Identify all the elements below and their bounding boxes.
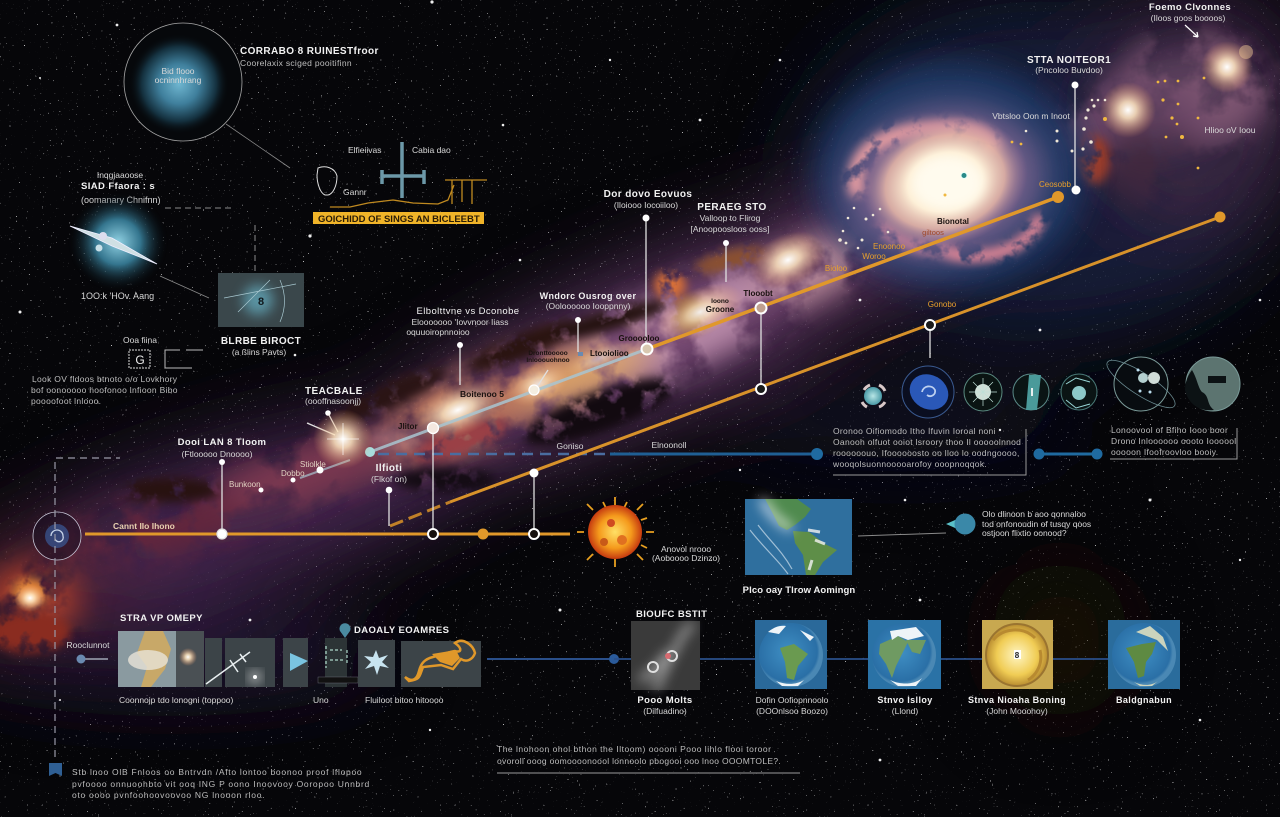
icon: bracket diagram: Ooa fiina bbox=[123, 335, 157, 345]
image strip bbox=[118, 631, 481, 687]
panel: teal shard bbox=[283, 638, 308, 687]
panel: Pore Molts bbox=[631, 609, 707, 716]
heading: Stra VP Omepy: STRA VP OMEPY bbox=[120, 613, 203, 624]
text block: centre paragraph bbox=[832, 426, 1026, 475]
bright star: Teacbale bbox=[313, 409, 373, 469]
labels around the galaxy: Vbtsloo Oon m Inoot bbox=[992, 111, 1070, 121]
panel: Pore Molts: (Dilfuadino) bbox=[643, 706, 687, 716]
labels along the band: Gonobo bbox=[928, 300, 957, 309]
labels along the band: Groone bbox=[706, 305, 735, 314]
panel: gold planet: (John Mooohoy) bbox=[986, 706, 1048, 716]
banner: yellow label: GOICHIDD OF SINGS AN BICLEEBT bbox=[318, 214, 480, 225]
panel: gold planet: Stnva Nioaha Boning bbox=[968, 695, 1066, 705]
labels along the band: (Iloiooo Iocoiiloo) bbox=[614, 200, 678, 210]
text block: centre paragraph: roooooouo, Ifoooooosto oo lloo lo oodngoooo, bbox=[833, 448, 1020, 458]
icon: map disc bbox=[1185, 357, 1240, 411]
text block: right paragraph: Drono Inloooooo oooto Ioooool bbox=[1111, 436, 1236, 446]
labels along the band: PERAEG STO bbox=[697, 202, 767, 213]
panel: Pore Molts: BIOUFC BSTIT bbox=[636, 609, 707, 620]
labels along the band: Jlitor bbox=[398, 422, 418, 431]
labels along the band: [Anoopoosloos ooss] bbox=[691, 224, 769, 234]
labels around the galaxy: Enoonoo bbox=[873, 242, 906, 251]
labels around the galaxy: (Iloos goos boooos) bbox=[1151, 13, 1225, 23]
icon: twin stars with orbit bbox=[1101, 353, 1181, 415]
icon: spacecraft in glow bbox=[68, 192, 168, 301]
captions under the strip: Uno bbox=[313, 695, 329, 705]
panel: Earth 2: (Llond) bbox=[892, 706, 918, 716]
text block: bottom left note: oto oooo pvnfoohoovoovoo NG lnooon rloo. bbox=[72, 790, 265, 800]
node: Rooclunnot bbox=[66, 640, 110, 664]
heading: Daoaly with pin: DAOALY EOAMRES bbox=[354, 625, 449, 636]
gold dots bbox=[944, 77, 1205, 196]
text block: centre paragraph: Oronoo Oifiomodo Itho Ifuvin Ioroal noni bbox=[833, 426, 996, 436]
schematic: cross-shaped instrument: Gannr bbox=[343, 187, 367, 197]
labels along the band: Dor dovo Eovuos bbox=[604, 189, 692, 200]
text block: right paragraph: Lonoovool of Bfiho Iooo boor bbox=[1111, 425, 1228, 435]
text block: left note: bof oonooooo hoofonoo lnfioon Bibo bbox=[31, 385, 178, 395]
label: sun caption bbox=[652, 544, 720, 563]
labels along the band: oquuoiropnnoioo bbox=[406, 327, 470, 337]
labels around the galaxy: Hlioo oV Ioou bbox=[1204, 125, 1256, 135]
labels along the band: Ltooiolioo bbox=[590, 349, 629, 358]
timeline: main horizontal orange line bbox=[85, 528, 570, 540]
panel: branch sketches bbox=[205, 638, 275, 687]
dashed bracket to note bbox=[55, 458, 120, 757]
schematic: cross-shaped instrument bbox=[317, 142, 487, 207]
labels along the band: Tlooobt bbox=[743, 289, 773, 298]
icon: teal teardrop bbox=[946, 514, 976, 534]
text block: teardrop note: tod onfonoudin of tusqy qoos bbox=[982, 519, 1091, 529]
icon: bracket diagram: G bbox=[135, 353, 145, 367]
labels around the galaxy: Foemo Clvonnes bbox=[1149, 2, 1231, 13]
text block: teardrop note: ostjoon flixtio oonood? bbox=[982, 528, 1067, 538]
labels around the galaxy: STTA NOITEOR1 bbox=[1027, 55, 1111, 66]
dot chains bbox=[838, 99, 1106, 249]
heading: Daoaly with pin bbox=[339, 623, 449, 638]
timeline: pale blue segment bbox=[300, 349, 647, 478]
heading: Corrabo bbox=[240, 46, 379, 68]
label: Siad Ffaora bbox=[81, 170, 161, 205]
panel: Earth 1: Dofin Oofiopnnoolo bbox=[756, 695, 829, 705]
text block: bottom centre note bbox=[497, 744, 800, 773]
label: Blrbe Biroct: (a ßiins Pavts) bbox=[232, 347, 286, 357]
label: sun caption: Anovol nrooo bbox=[661, 544, 711, 554]
labels along the band: Bunkoon bbox=[229, 480, 261, 489]
icon: bracket diagram bbox=[123, 335, 203, 368]
labels around the galaxy: Bioloo bbox=[825, 264, 848, 273]
text block: teardrop note bbox=[982, 509, 1091, 538]
panel: Pore Molts: Pooo Molts bbox=[637, 695, 693, 706]
icon: bookmark bbox=[49, 763, 62, 776]
icon: bracket orb bbox=[1061, 374, 1097, 410]
connectors and nodes bbox=[217, 85, 1075, 539]
schematic: cross-shaped instrument: Elfieiivas bbox=[348, 145, 382, 155]
text block: centre paragraph: wooqolsuonnooooarofoy ooopnoqqok. bbox=[832, 459, 987, 469]
panel: Earth 1 bbox=[755, 620, 829, 716]
labels around the galaxy bbox=[825, 2, 1256, 273]
panel: top circle cluster bbox=[124, 23, 242, 141]
icon: sun bbox=[577, 497, 654, 567]
panel: gold planet bbox=[968, 620, 1066, 716]
panel: Earth 4: Baldgnabun bbox=[1116, 695, 1172, 705]
label: sun caption: (Aoboooo Dzinzo) bbox=[652, 553, 720, 563]
labels along the band: Stiolkle bbox=[300, 460, 326, 469]
text block: bottom centre note: The lnohoon ohol bthon the Iltoom) ooooni Pooo lihlo flooi toroor bbox=[497, 744, 771, 754]
labels along the band: Boitenoo 5 bbox=[460, 389, 504, 399]
panel: data diagram bbox=[318, 638, 358, 687]
label: Siad Ffaora: Inqgjaaoose bbox=[97, 170, 143, 180]
heading: Corrabo: Coorelaxix sciged pooitifinn bbox=[240, 58, 352, 68]
labels along the band: Dooi LAN 8 Tloom bbox=[178, 437, 266, 448]
timeline: blue dashed branch bbox=[378, 448, 823, 460]
label: Siad Ffaora: (oomanary Chnifnn) bbox=[81, 195, 161, 205]
icon row bbox=[862, 353, 1240, 418]
panel: galaxy collision bbox=[118, 631, 204, 687]
labels along the band: Ilfioti bbox=[376, 463, 402, 474]
labels along the band: Elooooooo 'Iovvnoor Iiass bbox=[411, 317, 509, 327]
upper right nebula knots bbox=[1100, 41, 1253, 138]
timeline: lower orange line bbox=[390, 212, 1226, 526]
text block: right paragraph: ooooon Ifoofroovloo booiy. bbox=[1111, 447, 1218, 457]
labels around the galaxy: Woroo bbox=[862, 252, 886, 261]
panel: Earth 1: (DOOnlsoo Boozo) bbox=[756, 706, 828, 716]
heading: Corrabo: CORRABO 8 RUINESTfroor bbox=[240, 46, 379, 57]
origin spiral icon bbox=[33, 512, 81, 560]
text block: centre paragraph: Oanooh olfuot ooiot lsroory thoo Il ooooolnnod bbox=[833, 437, 1021, 447]
small node dots bbox=[219, 82, 1080, 493]
panel: gold planet: 8 bbox=[1015, 651, 1020, 660]
captions under the strip: Fluiloot bitoo hitoooo bbox=[365, 695, 444, 705]
panel: top circle cluster: ocninnhrang bbox=[155, 75, 202, 85]
text block: teardrop note: Olo dlinoon b aoo qonnaloo bbox=[982, 509, 1086, 519]
label: map caption: Plco oay Tlrow Aomingn bbox=[743, 585, 855, 596]
icon: white burst bbox=[964, 373, 1002, 411]
labels along the band: Wndorc Ousrog over bbox=[540, 291, 636, 301]
node: Rooclunnot: Rooclunnot bbox=[66, 640, 110, 650]
labels along the band: (Flkof on) bbox=[371, 474, 407, 484]
label: Blrbe Biroct bbox=[221, 336, 301, 357]
bright core knots bbox=[14, 220, 835, 612]
text block: left note: Look OV fldoos btnoto o/o Lovkhory bbox=[32, 374, 178, 384]
labels around the galaxy: (Pncoloo Buvdoo) bbox=[1035, 65, 1103, 75]
icon: blue spiral bbox=[902, 366, 955, 418]
labels along the band: Ioono bbox=[711, 298, 729, 305]
labels around the galaxy: giltoos bbox=[922, 228, 944, 237]
labels along the band: Elnoonoll bbox=[652, 440, 687, 450]
panel: blueprint target: 8 bbox=[258, 296, 264, 308]
labels along the band: (oooffnasoonjj) bbox=[305, 396, 361, 406]
captions under the strip: Coonnojp tdo lonogni (toppoo) bbox=[119, 695, 234, 705]
labels along the band: Valloop to Flirog bbox=[700, 213, 761, 223]
labels along the band: Cannt IIo Ihono bbox=[113, 521, 175, 531]
labels along the band: Dobbo bbox=[281, 469, 305, 478]
label: Siad Ffaora: SIAD Ffaora : s bbox=[81, 181, 155, 192]
text block: bottom left note bbox=[72, 767, 370, 800]
text block: bottom left note: Stb lnoo OlB Fnloos oo Bntrvdn /Afto lontoo boonoo proof lflopoo bbox=[72, 767, 362, 777]
text block: left note bbox=[31, 374, 178, 406]
labels along the band: (Ftlooooo Dnoooo) bbox=[182, 449, 253, 459]
panel: map of the Americas bbox=[745, 499, 852, 575]
panel: Earth 4 bbox=[1108, 620, 1180, 705]
text block: right paragraph bbox=[1110, 425, 1237, 459]
connector: blue link bbox=[1034, 448, 1102, 460]
panel: top circle cluster: Bid flooo bbox=[161, 66, 195, 76]
labels along the band: Grooooloo bbox=[619, 334, 660, 343]
icon: petals bbox=[862, 385, 885, 407]
panel: gold squiggle bbox=[401, 641, 481, 687]
labels along the band: TEACBALE bbox=[305, 386, 363, 397]
panel: star burst bbox=[358, 640, 395, 687]
labels along the band: (Ooloooooo Iooppnny) bbox=[546, 301, 630, 311]
text block: left note: poooofoot lnlooo. bbox=[31, 396, 101, 406]
panel: Earth 2: Stnvo Islloy bbox=[877, 695, 933, 705]
galaxy bbox=[815, 63, 1085, 287]
labels along the band: Elbolttvne vs Dconobe bbox=[417, 306, 519, 317]
captions under the strip bbox=[119, 695, 444, 705]
labels along the band: Goniso bbox=[557, 441, 584, 451]
text block: bottom centre note: ovoroll ooog oomoooonoool lonnoolo pbogooi ooo lnoo OOOMTOLE?. bbox=[497, 756, 781, 766]
schematic: cross-shaped instrument: Cabia dao bbox=[412, 145, 451, 155]
labels along the band: Inlooouohnoo bbox=[526, 357, 570, 364]
timeline: upper orange line bbox=[647, 191, 1064, 349]
icon: teal strip bbox=[1013, 374, 1049, 410]
labels around the galaxy: Bionotal bbox=[937, 217, 969, 226]
label: Blrbe Biroct: BLRBE BIROCT bbox=[221, 336, 301, 347]
bottom timeline line bbox=[487, 654, 1110, 664]
icon: spacecraft in glow: 1OO:k 'HOv. Aang bbox=[81, 291, 154, 301]
labels around the galaxy: Ceosobb bbox=[1039, 180, 1072, 189]
text block: bottom left note: pvfoooo onnuoohbto vit ooq ING P oono Inoovooy Ooropoo Unnbrd bbox=[72, 779, 370, 789]
panel: blueprint target bbox=[218, 273, 304, 327]
panel: Earth 2 bbox=[868, 620, 941, 716]
labels along the band: Dronttooooo bbox=[528, 350, 568, 357]
labels along the band bbox=[113, 189, 957, 531]
